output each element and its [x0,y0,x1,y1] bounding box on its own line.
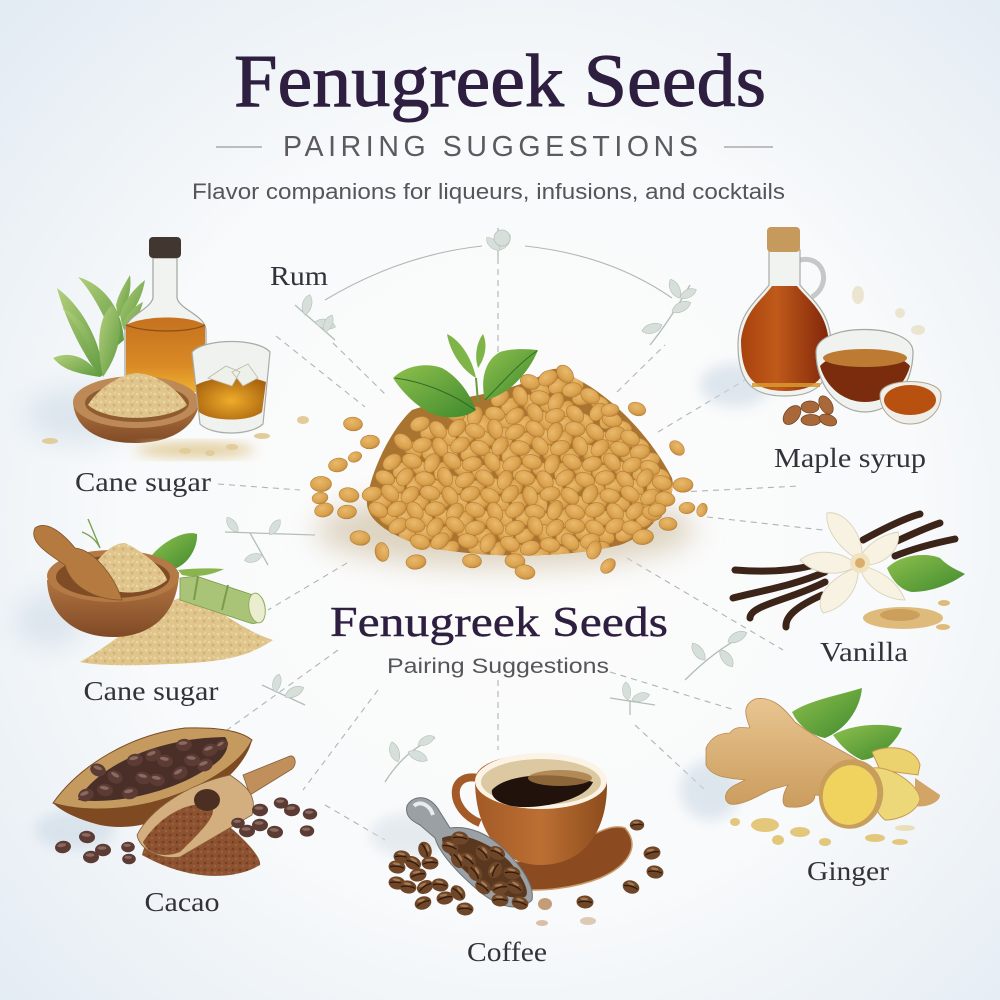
bowl [47,543,179,637]
rum glass [192,342,270,433]
leaf [887,555,965,592]
tagline: Flavor companions for liqueurs, infusions, and cocktails [192,179,785,204]
title: Fenugreek Seeds [234,40,766,123]
saucer [513,827,632,890]
handle [456,777,480,823]
shadow [25,387,135,443]
label: coffee: Coffee [467,937,547,967]
sugar pile [80,597,273,665]
under layer of seeds [372,376,673,556]
nuts [780,393,838,428]
seed pile [310,334,709,581]
seed pile leaves [393,334,538,417]
flower [800,513,905,613]
shadow [680,760,740,820]
scoop [137,756,295,858]
coffee beans [388,819,664,926]
center heading: Fenugreek Seeds [330,600,668,646]
icon: cane sugar [15,519,273,665]
botanical sprigs [224,228,749,782]
ginger specks [730,818,915,846]
scoop [34,525,122,600]
seeds [360,362,676,558]
ginger leaves [792,688,862,738]
coffee scoop [407,798,532,907]
vanilla pods [733,514,955,627]
syrup bowl [816,330,913,412]
center heading [330,600,668,678]
label: ginger: Ginger [807,856,889,886]
label: cane sugar (lower): Cane sugar [84,676,218,706]
label: cane sugar (upper): Cane sugar [75,467,211,497]
icon: maple syrup [700,227,941,428]
label: rum: Rum [270,261,328,291]
shadow [15,592,85,648]
subtitle: PAIRING SUGGESTIONS [283,131,702,163]
spilled sugar [42,416,309,457]
shadow [700,363,770,407]
small bowl [880,382,941,424]
shadow [370,813,450,857]
icon: rum [25,237,309,457]
pile base [367,369,673,556]
cane stalk [180,576,267,624]
connector lines [218,246,823,840]
icon: ginger [680,688,940,846]
beans [76,738,230,804]
cocoa powder [142,812,260,876]
pile shadow [315,492,695,568]
label: maple syrup: Maple syrup [774,443,926,473]
bottle [125,237,206,392]
sugar bowl [73,373,200,443]
loose seeds [310,400,709,581]
icon: coffee [370,753,664,926]
ginger slices [811,748,940,836]
icon: vanilla [733,513,965,630]
cup [475,753,607,865]
shadow [35,810,115,850]
syrup jug [738,227,831,396]
droplets [852,286,925,335]
label: cacao: Cacao [144,887,220,917]
leaves [152,533,197,570]
loose beans [54,797,317,864]
label: vanilla: Vanilla [820,637,908,667]
icon: cacao [35,728,317,876]
ginger root [706,698,875,807]
pod [53,728,252,827]
sugar crumbs [863,600,950,630]
palm leaves [53,275,145,377]
center heading: Pairing Suggestions [387,655,609,678]
